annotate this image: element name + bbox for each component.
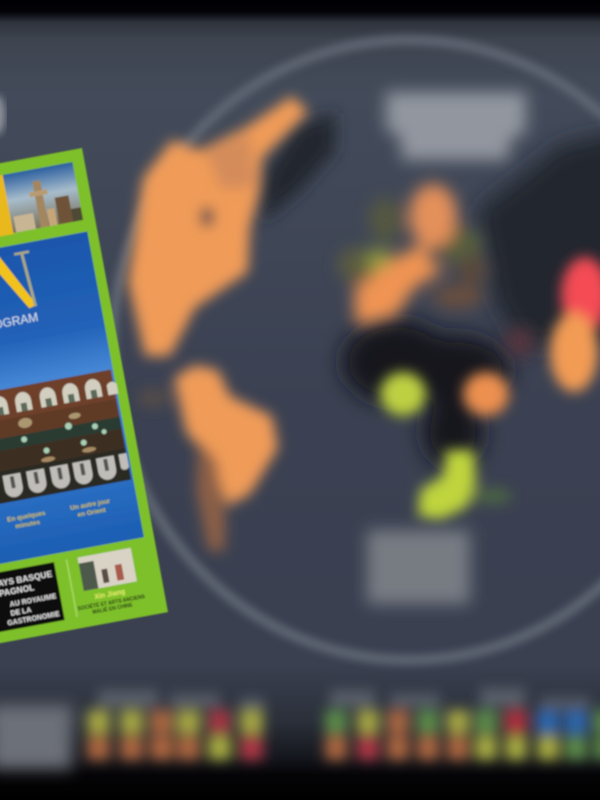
cover: black story box: AU ROYAUME — [9, 593, 57, 609]
cover: black story box: GASTRONOMIE — [7, 611, 61, 627]
cover: small story text: SOCIÉTÉ ET ARTS ANCIENS — [77, 592, 146, 612]
text block: upper map note — [386, 92, 526, 160]
cover: yellow captions — [7, 498, 113, 532]
legend: right group — [325, 688, 600, 760]
cover: palace photo — [0, 369, 134, 516]
cover: black story box: DE LA — [10, 607, 32, 618]
text block: legend intro — [0, 705, 72, 769]
map: North America — [128, 96, 308, 356]
map: Africa coloured countries — [380, 372, 512, 520]
cover: yellow captions: minutes — [15, 519, 41, 530]
cover: yellow captions: Un autre jour — [70, 498, 111, 512]
left edge grey fragment — [0, 95, 5, 135]
map: India and Southeast Asia — [550, 257, 600, 392]
cover: yellow captions: en Orient — [77, 507, 107, 519]
cover: black story box — [0, 562, 65, 640]
map: dark landmass Asia — [478, 125, 600, 345]
cover: top photo — [0, 162, 83, 257]
legend: left group — [87, 690, 264, 760]
text block: lower map note — [367, 530, 470, 604]
cover: blue panel — [0, 231, 144, 574]
cover: small story text: Xin Jiang — [94, 589, 126, 601]
map: Europe and Middle East — [338, 184, 535, 357]
cover: masthead N — [0, 249, 39, 314]
cover: green divider — [66, 560, 78, 617]
map: dark landmass Greenland — [262, 112, 335, 222]
cover: green frame — [0, 148, 168, 651]
cover: small story text — [76, 585, 147, 618]
cover: small story text: MALIÉ EN CHINE — [92, 600, 134, 616]
cover: small photo — [78, 548, 137, 591]
globe ring — [112, 40, 600, 660]
map: South America — [137, 365, 278, 552]
cover: yellow captions: En quelques — [7, 510, 46, 524]
map: Africa dark region — [342, 320, 510, 468]
magazine cover — [0, 148, 168, 651]
